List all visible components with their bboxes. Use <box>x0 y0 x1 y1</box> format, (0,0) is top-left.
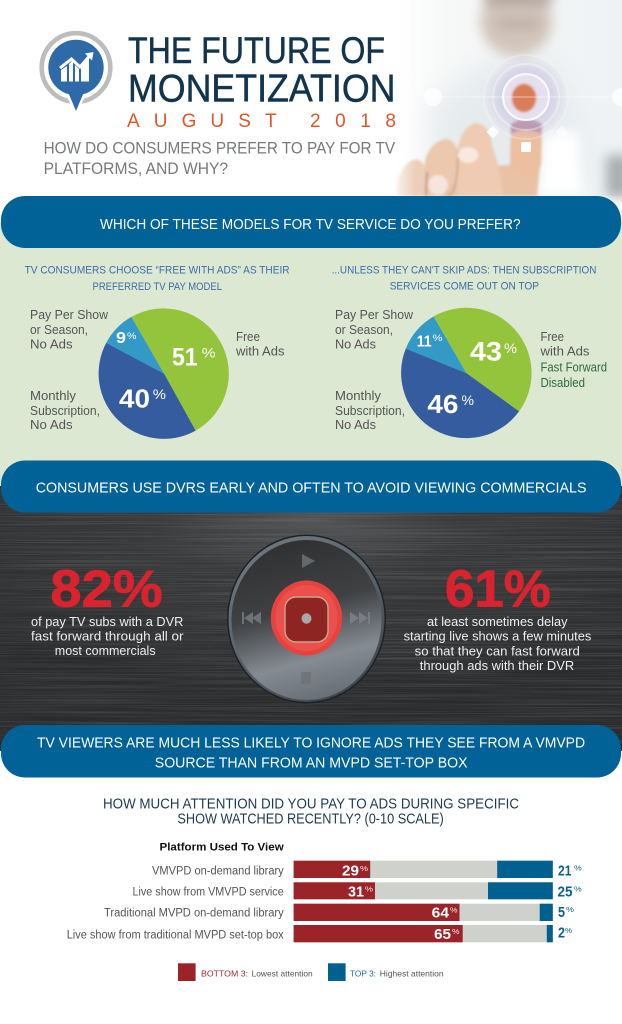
pie chart: fast forward disabled: 43 <box>470 337 502 367</box>
heading: attention question: SHOW WATCHED RECENTLY? (0-10 SCALE) <box>177 810 444 827</box>
pie chart: pay model preference: % <box>153 386 166 402</box>
pie chart: pay model preference <box>99 308 229 439</box>
pie chart: fast forward disabled: 46 <box>427 389 458 419</box>
date: AUGUST <box>127 111 277 132</box>
row: live show from traditional MVPD set-top box: % <box>565 926 572 935</box>
title: MONETIZATION <box>128 68 396 110</box>
heading: unless they can't skip ads: SERVICES COME OUT ON TOP <box>390 280 539 292</box>
icon: red record button <box>271 580 342 656</box>
heading: attention question: HOW MUCH ATTENTION DID YOU PAY TO ADS DURING SPECIFIC <box>103 795 519 812</box>
banner: VMVPD vs MVPD: SOURCE THAN FROM AN MVPD SET-TOP BOX <box>155 754 468 771</box>
row: live show from VMVPD service: % <box>574 884 582 894</box>
panel: right pie section <box>332 264 607 438</box>
subtitle: HOW DO CONSUMERS PREFER TO PAY FOR TV <box>44 140 395 158</box>
pie labels <box>30 308 284 432</box>
icon: fast forward <box>350 612 370 624</box>
pie labels: or Season, <box>335 323 393 337</box>
legend: Lowest attention <box>252 969 313 979</box>
pie chart: fast forward disabled: 11 <box>417 334 432 351</box>
heading: free with ads: PREFERRED TV PAY MODEL <box>92 281 222 293</box>
pie chart: pay model preference: 9 <box>116 330 126 347</box>
stat: 82 percent: fast forward through all or <box>31 630 184 644</box>
heading: free with ads: TV CONSUMERS CHOOSE “FREE WITH ADS” AS THEIR <box>25 264 290 276</box>
pie labels: with Ads <box>539 345 590 359</box>
banner: VMVPD vs MVPD <box>1 725 621 778</box>
row: live show from traditional MVPD set-top box <box>67 925 572 943</box>
subtitle: PLATFORMS, AND WHY? <box>44 160 228 178</box>
banner: TV service models <box>1 196 621 248</box>
panel: left pie section <box>25 264 290 439</box>
pie labels: Monthly <box>335 389 382 403</box>
pie labels: Free <box>236 330 260 344</box>
row: traditional MVPD on-demand library <box>104 904 574 921</box>
legend: BOTTOM 3: <box>201 969 248 979</box>
legend: TOP 3: <box>350 969 376 979</box>
pie labels: No Ads <box>30 418 73 432</box>
icon: rewind <box>242 612 261 624</box>
legend <box>178 963 444 981</box>
stat: 61 percent: through ads with their DVR <box>420 659 574 673</box>
row: live show from VMVPD service: 31 <box>348 885 364 901</box>
pie labels: No Ads <box>335 337 376 351</box>
legend: Highest attention <box>380 969 444 979</box>
row: live show from traditional MVPD set-top box: 2 <box>558 926 565 942</box>
row: live show from VMVPD service: % <box>365 884 373 894</box>
icon: play <box>302 554 315 568</box>
pie labels <box>335 308 607 432</box>
row: live show from VMVPD service <box>132 882 582 901</box>
heading: unless they can't skip ads: ...UNLESS THEY CAN'T SKIP ADS: THEN SUBSCRIPTION <box>332 264 596 276</box>
pie chart: pay model preference: % <box>127 331 136 341</box>
pie labels: Disabled <box>540 376 585 390</box>
row: traditional MVPD on-demand library: % <box>450 906 458 914</box>
stat: 61 percent: so that they can fast forward <box>415 644 580 658</box>
row: traditional MVPD on-demand library: % <box>566 905 574 914</box>
row: live show from VMVPD service: Live show from VMVPD service <box>132 887 284 899</box>
pie labels: Pay Per Show <box>30 308 109 322</box>
pie chart: pay model preference: 51 <box>172 344 198 372</box>
subtitle <box>44 140 395 178</box>
row: traditional MVPD on-demand library: Traditional MVPD on-demand library <box>104 908 284 920</box>
icon: map pin logo with rising chart <box>42 33 110 111</box>
stat: 82 percent <box>31 561 184 658</box>
stat: 61 percent: at least sometimes delay <box>427 615 568 629</box>
banner: DVR use: CONSUMERS USE DVRS EARLY AND OFTEN TO AVOID VIEWING COMMERCIALS <box>36 479 586 496</box>
pie chart: pay model preference: 40 <box>119 383 150 413</box>
stat: 61 percent: 61% <box>445 561 551 619</box>
title: THE FUTURE OF <box>128 30 385 71</box>
icon: DVR remote dial <box>227 534 386 704</box>
pie chart: fast forward disabled: % <box>504 340 517 356</box>
stat: 61 percent: starting live shows a few minutes <box>404 630 591 644</box>
row: VMVPD on-demand library: 21 <box>558 864 571 880</box>
pie chart: fast forward disabled <box>401 308 532 438</box>
panel: green survey background <box>0 222 622 486</box>
pie labels: No Ads <box>30 337 73 351</box>
panel: dark brushed metal background <box>0 486 622 751</box>
pie labels: Fast Forward <box>540 361 607 375</box>
pie labels: Free <box>540 330 564 344</box>
banner: VMVPD vs MVPD: TV VIEWERS ARE MUCH LESS LIKELY TO IGNORE ADS THEY SEE FROM A VMVPD <box>37 734 585 751</box>
row: VMVPD on-demand library: VMVPD on-demand library <box>152 865 284 877</box>
banner: TV service models: WHICH OF THESE MODELS FOR TV SERVICE DO YOU PREFER? <box>100 217 521 233</box>
bar chart: attention by platform <box>67 842 582 943</box>
hero photo: hand touching screen <box>390 0 622 197</box>
icon: stop <box>301 672 311 684</box>
pie chart: fast forward disabled: % <box>462 392 474 408</box>
stat: 82 percent: of pay TV subs with a DVR <box>31 615 183 629</box>
heading: free with ads <box>25 264 290 293</box>
row: live show from traditional MVPD set-top box: % <box>452 927 460 936</box>
stat: 61 percent <box>404 561 591 673</box>
row: traditional MVPD on-demand library: 64 <box>432 905 449 921</box>
pie labels: Subscription, <box>30 404 100 418</box>
pie labels: or Season, <box>30 323 88 337</box>
date: 2018 <box>310 111 396 132</box>
row: traditional MVPD on-demand library: 5 <box>558 905 565 921</box>
pie labels: with Ads <box>235 345 284 359</box>
stat: 82 percent: most commercials <box>55 644 156 658</box>
heading: attention question <box>103 795 519 827</box>
pie labels: Pay Per Show <box>335 308 414 322</box>
pie labels: Monthly <box>30 389 77 403</box>
row: live show from traditional MVPD set-top box: 65 <box>434 927 451 943</box>
row: VMVPD on-demand library <box>152 861 582 880</box>
pie chart: pay model preference: % <box>202 345 216 361</box>
stat: 82 percent: 82% <box>50 561 163 619</box>
row: VMVPD on-demand library: % <box>360 864 368 873</box>
row: live show from VMVPD service: 25 <box>558 885 572 901</box>
row: live show from traditional MVPD set-top box: Live show from traditional MVPD set-top box <box>67 929 284 941</box>
pie labels: No Ads <box>335 418 376 432</box>
title <box>128 30 396 110</box>
pie labels: Subscription, <box>335 404 405 418</box>
row: VMVPD on-demand library: 29 <box>342 864 359 880</box>
pie chart: fast forward disabled: % <box>432 333 442 343</box>
date <box>127 111 396 132</box>
chart subheading: Platform Used To View <box>160 842 284 854</box>
row: VMVPD on-demand library: % <box>574 864 582 872</box>
heading: unless they can't skip ads <box>332 264 596 292</box>
banner: DVR use <box>1 460 621 512</box>
